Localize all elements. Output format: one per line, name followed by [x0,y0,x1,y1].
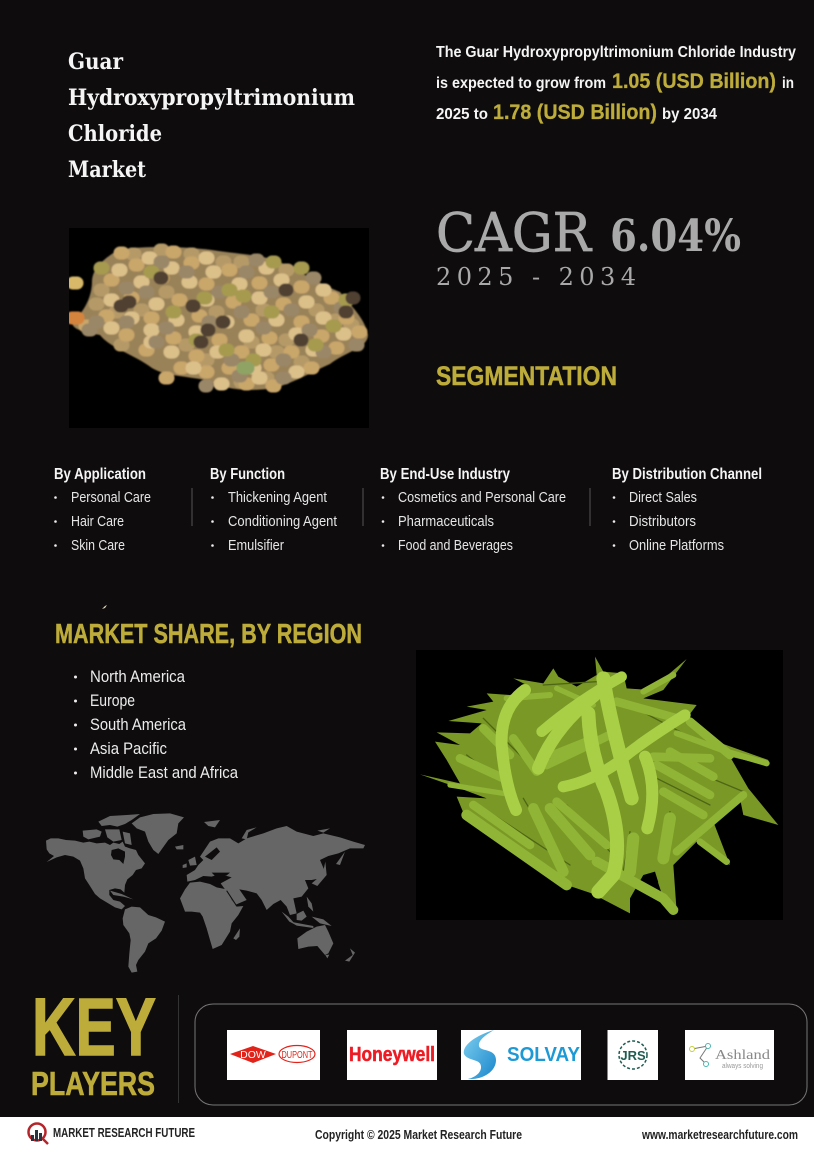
column: by end-use industry: By End-Use Industry [380,466,510,483]
CAGR figure: CAGR [436,203,593,264]
heading: key players: PLAYERS [31,1065,155,1102]
column: by function: Thickening Agent [228,490,327,506]
footer bar [0,1117,814,1150]
column: by end-use industry: Pharmaceuticals [398,514,494,530]
logo: Solvay [461,1030,581,1080]
column: by application: Skin Care [71,538,125,554]
growth summary text: by 2034 [662,106,717,123]
image: guar seeds [69,228,369,428]
region list [74,668,239,782]
logo: Ashland [685,1030,774,1080]
title: Chloride [68,121,162,147]
logo: Solvay: SOLVAY [507,1044,581,1066]
region list: Europe [90,692,135,710]
column: by distribution channel [612,466,762,554]
panel: key player logos [195,1004,807,1105]
world map [46,813,365,973]
title: Market [68,157,147,183]
icon: market research future [28,1124,48,1144]
CAGR figure [436,203,741,291]
title: Hydroxypropyltrimonium [68,85,355,111]
heading: market share by region: MARKET SHARE, BY REGION [55,618,362,649]
growth summary text: 1.05 (USD Billion) [612,69,776,93]
growth summary text: 1.78 (USD Billion) [493,100,657,124]
growth summary text: 2025 to [436,106,488,123]
growth summary text [436,44,796,124]
column: by distribution channel: Online Platforms [629,538,724,554]
column: by function: Emulsifier [228,538,284,554]
column: by function [210,466,337,554]
logo: Ashland: Ashland [715,1048,770,1063]
title: Guar [68,49,123,75]
column: by application: By Application [54,466,146,483]
column: by distribution channel: By Distribution Channel [612,466,762,483]
logo: Honeywell [347,1030,437,1080]
column: by application: Personal Care [71,490,151,506]
column: by end-use industry [380,466,566,554]
title [68,49,355,183]
logo: Dow DuPont: DOW [240,1049,266,1061]
growth summary text: is expected to grow from [436,75,606,92]
logo: JRS [608,1030,658,1080]
logo: JRS: JRS [620,1048,646,1063]
growth summary text: in [782,75,794,92]
column: by end-use industry: Cosmetics and Personal Care [398,490,566,506]
column: by end-use industry: Food and Beverages [398,538,513,554]
column: by application [54,466,151,554]
column: by application: Hair Care [71,514,124,530]
heading: key players: KEY [32,982,156,1073]
image: guar pods [416,650,783,920]
CAGR figure: 6.04% [610,211,741,262]
logo: Honeywell: Honeywell [349,1044,435,1066]
column: by function: Conditioning Agent [228,514,337,530]
logo: Dow DuPont [227,1030,320,1080]
region list: South America [90,716,187,734]
logo: Dow DuPont: DUPONT [282,1050,312,1061]
logo: Ashland: always solving [722,1063,763,1070]
region list: Middle East and Africa [90,764,239,782]
CAGR figure: 2025 - 2034 [436,263,636,291]
column: by distribution channel: Distributors [629,514,696,530]
heading: segmentation: SEGMENTATION [436,361,617,391]
column: by function: By Function [210,466,285,483]
heading: key players [31,982,156,1102]
footer bar: Copyright © 2025 Market Research Future [315,1127,522,1142]
region list: North America [90,668,186,686]
column: by distribution channel: Direct Sales [629,490,697,506]
region list: Asia Pacific [90,740,167,758]
footer bar: MARKET RESEARCH FUTURE [53,1125,195,1140]
